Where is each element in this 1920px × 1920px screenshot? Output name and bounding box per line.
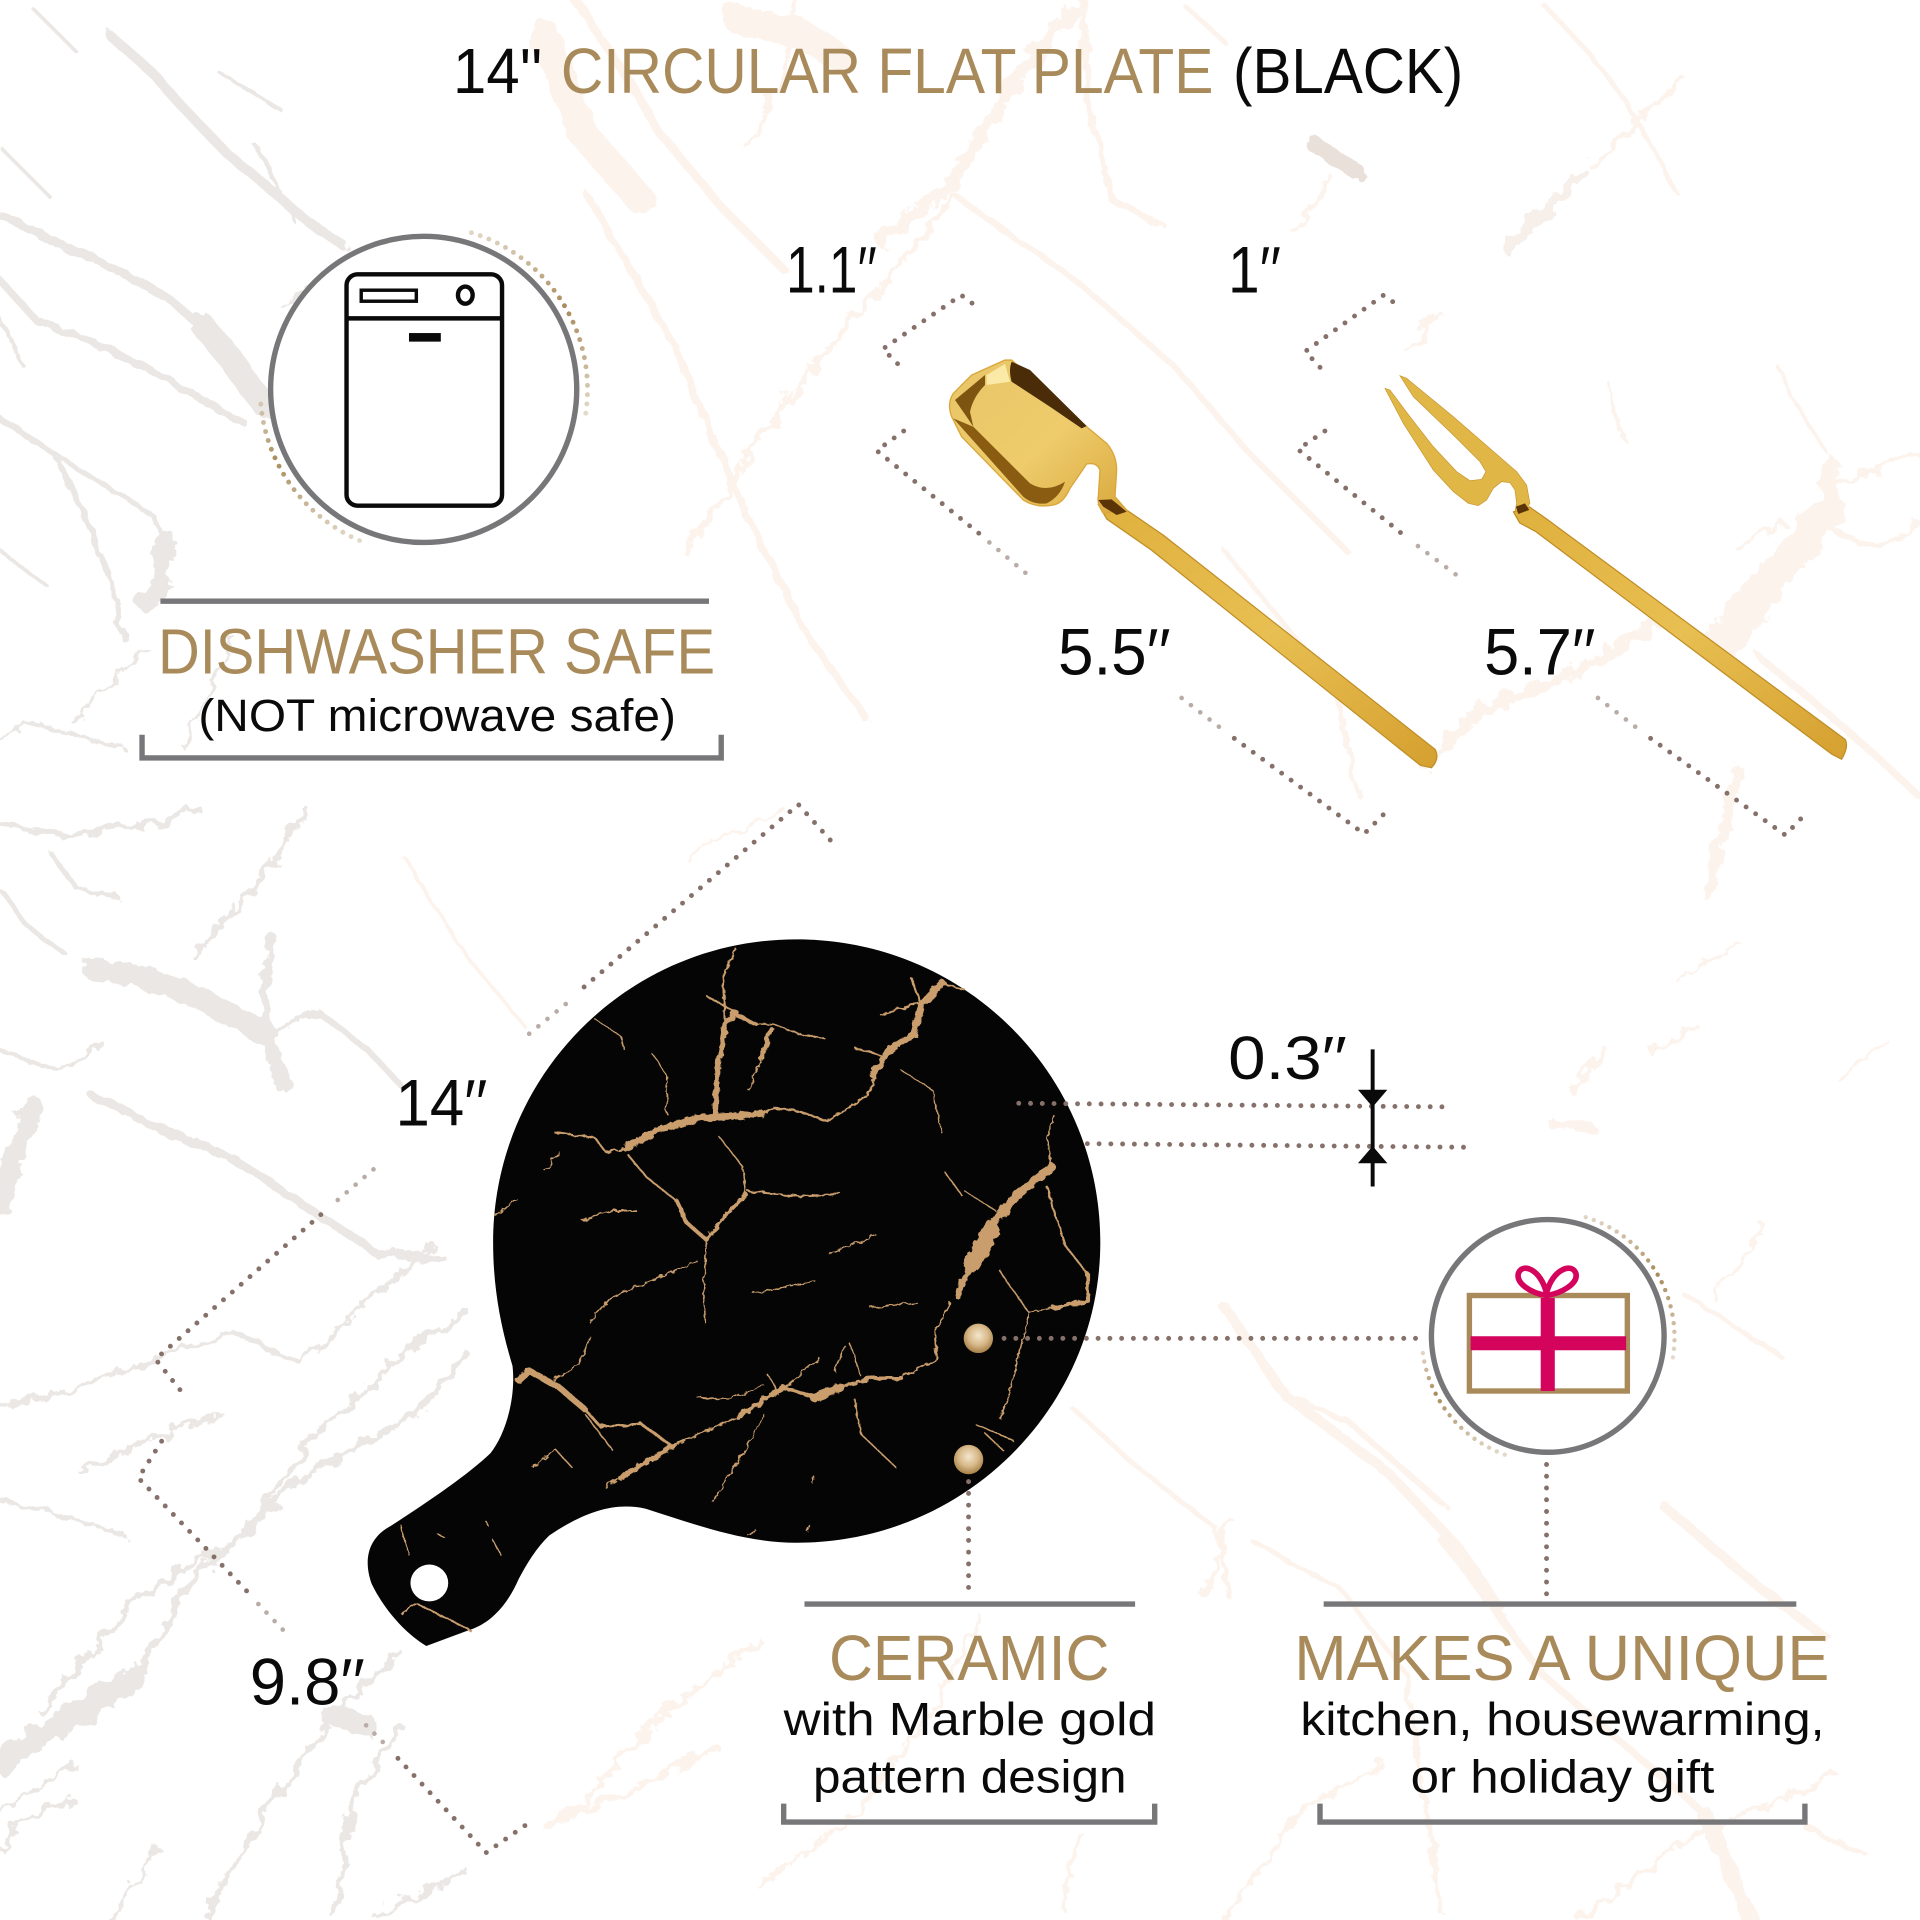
plate dimension brackets	[138, 804, 830, 1853]
circle outline	[1431, 1220, 1664, 1452]
title: (BLACK)	[1233, 36, 1463, 107]
title dotted divider	[367, 136, 1567, 140]
badge: dishwasher safe	[261, 233, 588, 544]
title: CIRCULAR FLAT PLATE	[561, 36, 1213, 107]
fork length dimension: 5.7′′	[1484, 616, 1596, 690]
tines	[1385, 376, 1530, 514]
thickness dimension	[1019, 1024, 1474, 1187]
fork width dimension	[1228, 234, 1397, 367]
dotted gold ring	[261, 233, 588, 544]
icon: dishwasher	[347, 274, 502, 506]
caption: gift: kitchen, housewarming,	[1300, 1693, 1824, 1745]
caption: gift: MAKES A UNIQUE	[1294, 1623, 1829, 1694]
diameter label: 14′′	[396, 1066, 487, 1140]
handle	[1098, 503, 1437, 768]
dotted gold ring	[1423, 1217, 1675, 1457]
black marble plate	[368, 939, 1100, 1646]
thickness arrow	[1371, 1049, 1374, 1187]
badge: gift	[1423, 1217, 1675, 1457]
title: 14''	[453, 36, 542, 107]
plate body	[368, 939, 1100, 1646]
spoon width dimension	[786, 234, 976, 364]
caption: dishwasher safe	[142, 601, 721, 758]
circle outline	[271, 236, 577, 542]
caption: dishwasher safe: DISHWASHER SAFE	[158, 616, 715, 687]
caption: ceramic: CERAMIC	[829, 1623, 1109, 1694]
caption: ceramic: pattern design	[813, 1751, 1127, 1803]
spoon length dimension: 5.5′′	[1058, 616, 1171, 690]
handle hole	[410, 1565, 448, 1601]
caption: gift: or holiday gift	[1411, 1751, 1714, 1803]
caption: ceramic: with Marble gold	[783, 1693, 1156, 1745]
length label: 9.8′′	[250, 1645, 365, 1719]
spoon length dimension	[877, 431, 1387, 834]
handle	[1513, 507, 1847, 759]
fork width dimension: 1′′	[1228, 234, 1281, 308]
caption: dishwasher safe: (NOT microwave safe)	[198, 690, 676, 741]
thickness dimension: 0.3′′	[1228, 1024, 1347, 1092]
gold fork	[1385, 376, 1847, 759]
gold spoon	[950, 360, 1437, 768]
icon: gift box	[1469, 1268, 1627, 1391]
gold veins	[401, 949, 1088, 1630]
callout beads and leader lines	[954, 1324, 1547, 1598]
bowl	[950, 360, 1127, 515]
caption: gift	[1294, 1604, 1829, 1822]
caption: ceramic	[783, 1604, 1156, 1822]
spoon width dimension: 1.1′′	[786, 234, 877, 308]
fork length dimension	[1298, 431, 1809, 835]
